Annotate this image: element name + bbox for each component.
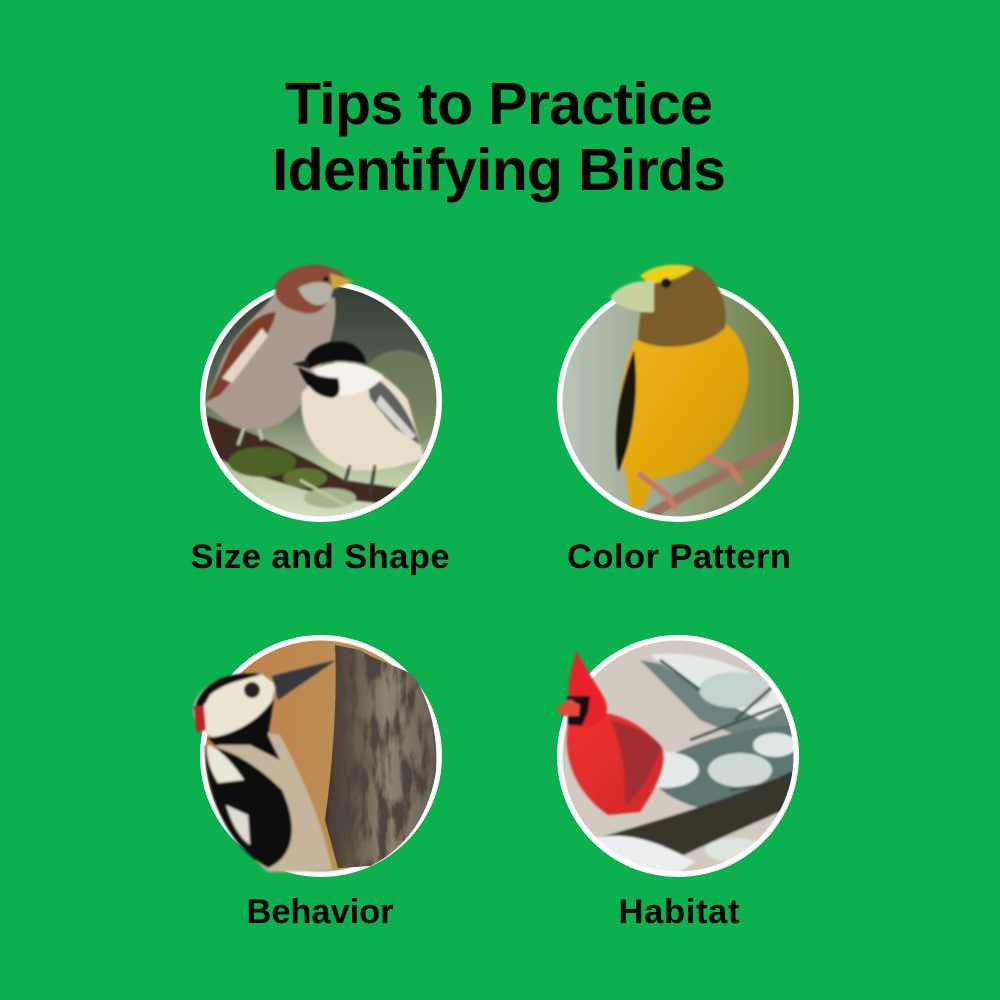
panel: behavior [193,635,442,931]
label: behavior: Behavior [246,893,394,931]
icon: tree trunk [325,645,436,868]
panel: habitat [556,635,799,931]
label: color pattern: Color Pattern [567,538,791,576]
photo circle: habitat [556,635,799,878]
label: size and shape: Size and Shape [190,538,450,576]
label: habitat: Habitat [618,893,740,931]
title: Identifying Birds [272,137,726,203]
icon: sparrow [205,265,354,429]
icon: snowy spruce [631,654,797,812]
icon: cardinal [556,651,663,815]
icon: evening grosbeak [610,264,749,510]
icon: woodpecker [193,660,336,872]
photo circle: color pattern [557,264,799,522]
panel: size and shape [190,265,450,576]
photo circle: behavior [193,635,442,878]
panel: color pattern [557,264,799,576]
title: Tips to Practice [285,71,713,137]
photo circle: size and shape [200,265,445,522]
icon: chickadee [292,341,424,495]
title [272,71,726,203]
